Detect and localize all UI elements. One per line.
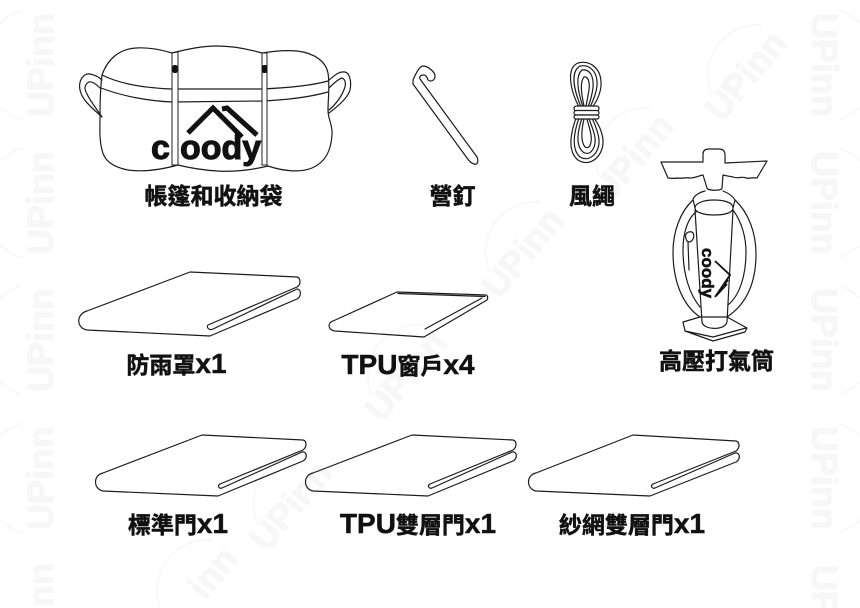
icon: folded TPU window	[329, 292, 488, 337]
icon: tent carry bag with coody logo	[80, 46, 351, 171]
watermark pattern: UPinn	[583, 105, 682, 211]
watermark pattern: UPinn	[20, 151, 61, 255]
coody logo: c	[151, 129, 170, 167]
pump hose	[673, 200, 756, 317]
watermark pattern: UPinn	[804, 151, 845, 255]
pump cylinder	[695, 200, 733, 328]
label: air pump: 高壓打氣筒	[659, 348, 774, 374]
pump base	[683, 317, 747, 341]
pump gauge	[685, 232, 694, 270]
label: mesh double door: 紗網雙層門x1	[559, 508, 705, 539]
watermark pattern: UPinn	[356, 322, 455, 428]
label: tent and bag: 帳篷和收納袋	[144, 183, 282, 209]
label: rain cover: 防雨罩x1	[126, 348, 227, 379]
watermark pattern: UPinn	[696, 22, 795, 128]
watermark pattern: UPinn	[804, 426, 845, 530]
label: standard door: 標準門x1	[128, 508, 228, 539]
watermark pattern: UPinn	[804, 288, 845, 392]
icon: folded standard door	[96, 435, 306, 496]
label: TPU double door: TPU雙層門x1	[340, 508, 496, 539]
watermark pattern: UPinn	[241, 452, 340, 558]
coody logo	[151, 108, 261, 167]
label: tent peg: 營釘	[430, 183, 476, 209]
watermark pattern: UPinn	[804, 13, 845, 117]
pump handle	[661, 149, 767, 190]
coody logo: oody	[180, 129, 261, 167]
bag band	[101, 75, 328, 102]
label: guy rope: 風繩	[569, 183, 615, 209]
icon: folded rain cover	[79, 272, 300, 336]
watermark pattern: UPinn	[473, 199, 572, 305]
bag straps	[172, 52, 267, 165]
icon: air pump	[661, 149, 767, 341]
label: TPU window: TPU窗戶x4	[341, 349, 475, 380]
watermark pattern: inn	[179, 538, 245, 606]
bag handles	[80, 72, 351, 117]
icon: folded TPU double door	[306, 435, 516, 496]
icon: tent peg	[413, 66, 478, 164]
icon: guy rope coil	[571, 62, 603, 163]
watermark pattern: UPinn	[20, 13, 61, 117]
icon: folded mesh double door	[528, 435, 739, 496]
watermark pattern: UPinn	[20, 288, 61, 392]
pump logo: coody	[698, 248, 717, 299]
pump collar	[693, 191, 735, 208]
watermark pattern: UPinn	[20, 426, 61, 530]
pump logo	[698, 248, 730, 299]
